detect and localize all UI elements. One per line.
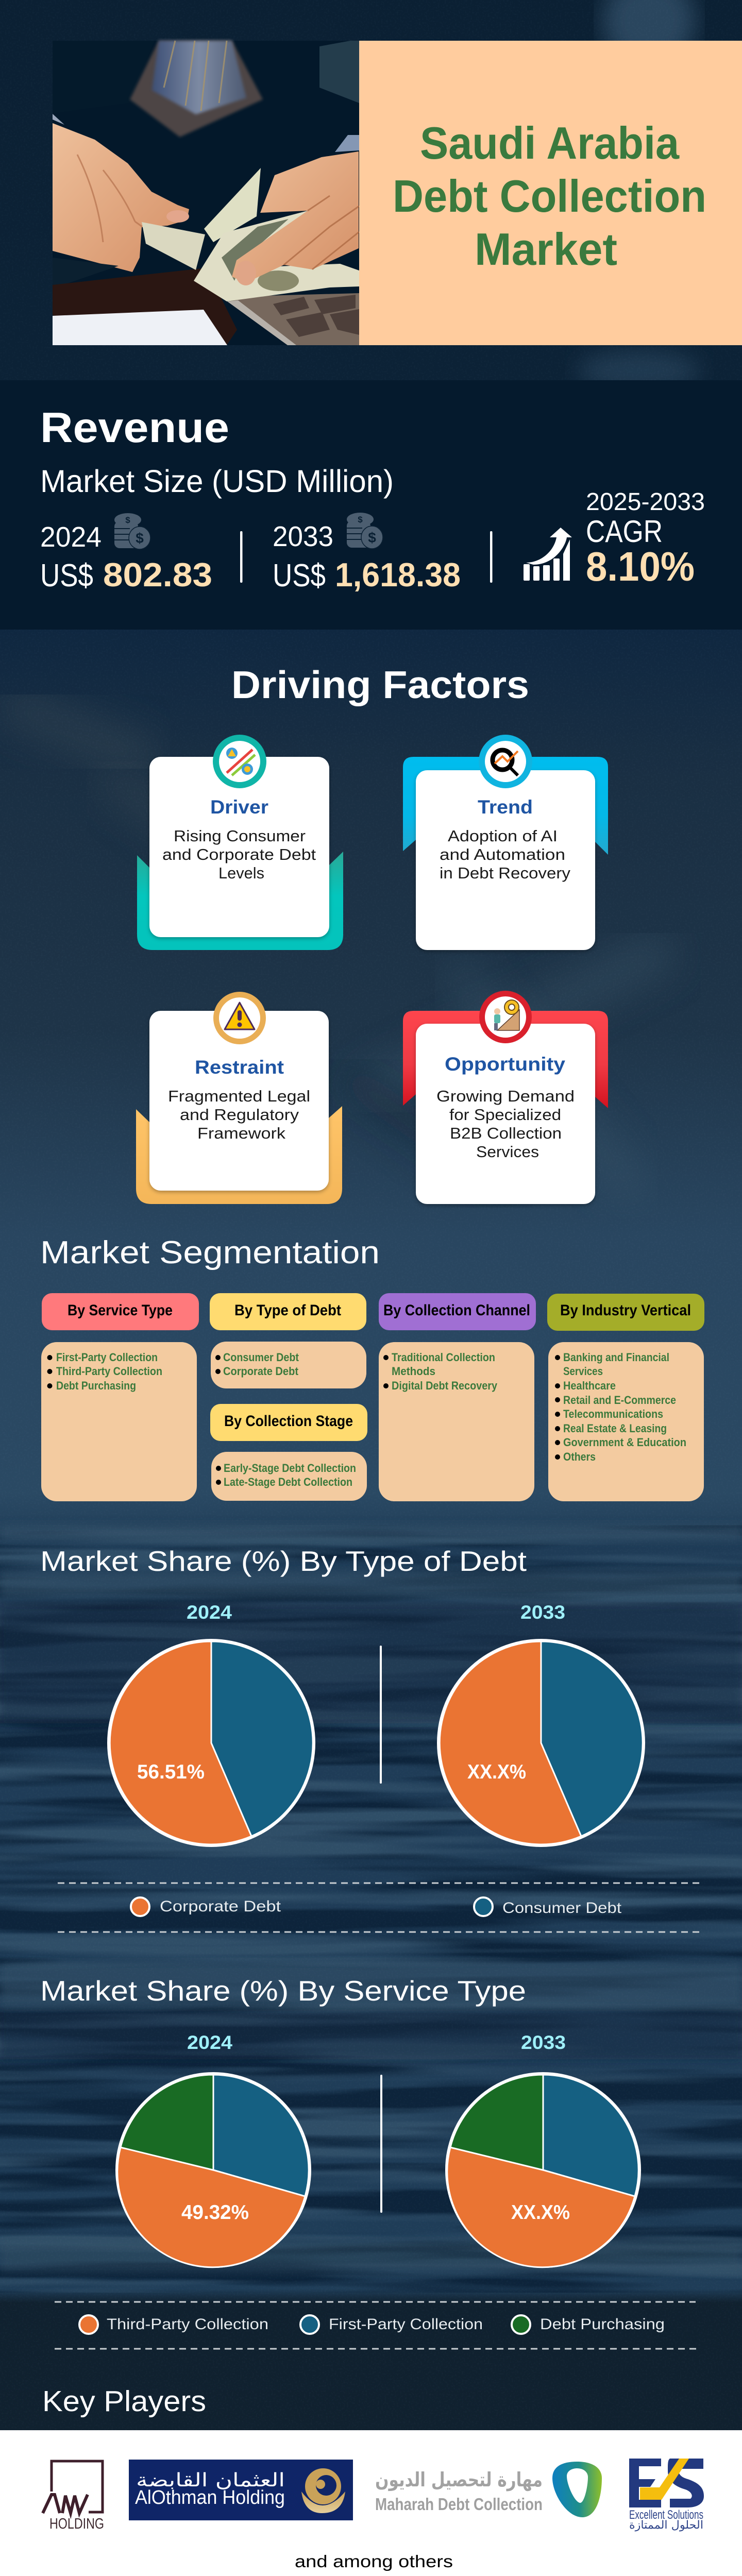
pie chart: service type 2024: 49.32%: [181, 2201, 249, 2224]
pie chart: service type 2024: [115, 2072, 311, 2268]
industry vertical list: Others: [563, 1450, 596, 1463]
logo: AlOthman Holding: [129, 2460, 353, 2520]
driver text: Levels: [218, 864, 264, 882]
panel: revenue: [0, 380, 742, 630]
type of debt list: Consumer Debt: [223, 1351, 299, 1364]
opportunity text: for Specialized: [449, 1106, 561, 1124]
opportunity text: [436, 1087, 575, 1161]
restraint text: [168, 1087, 310, 1142]
type of debt list: Corporate Debt: [223, 1365, 299, 1378]
opportunity text: Services: [476, 1143, 539, 1161]
value 2024: 802.83: [103, 556, 212, 594]
type of debt list: [215, 1351, 299, 1378]
hero: photo of hands counting money: [53, 41, 359, 345]
icon: coins 2024: $: [125, 515, 130, 525]
collection channel list: Methods: [392, 1365, 435, 1378]
panel: by industry vertical: [547, 1294, 704, 1501]
driver text: and Corporate Debt: [162, 845, 316, 863]
panel: by collection channel: [379, 1293, 536, 1501]
icon: coins 2024: $: [136, 530, 144, 546]
cagr: [586, 488, 705, 589]
panel: by type of debt: [210, 1293, 366, 1388]
trend text: [440, 827, 571, 882]
trend text: in Debt Recovery: [440, 864, 571, 882]
legend: service type: Third-Party Collection: [107, 2316, 268, 2333]
icon: growth chart arrow: [524, 528, 572, 581]
panel: by service type: By Service Type: [68, 1302, 173, 1319]
card: trend: [403, 735, 608, 950]
restraint text: and Regulatory: [180, 1106, 299, 1124]
collection channel list: Traditional Collection: [392, 1351, 495, 1364]
legend: type of debt: [131, 1897, 622, 1917]
panel: key players: [0, 2430, 742, 2576]
heading: key players: Key Players: [42, 2385, 206, 2418]
industry vertical list: [555, 1351, 686, 1463]
revenue heading: Revenue: [40, 403, 229, 451]
pie chart: type of debt 2033: XX.X%: [467, 1761, 526, 1783]
logo: Excellent Solutions: الحلول الممتازة: [629, 2519, 703, 2532]
year label 2024 service: 2024: [187, 2032, 232, 2053]
icon: coins 2033: [347, 513, 383, 549]
logo: AlOthman Holding: العثمان القابضة: [136, 2470, 285, 2491]
icon: coins 2024: [114, 513, 150, 549]
title: [393, 117, 706, 275]
pie chart: service type 2033: [445, 2072, 641, 2268]
industry vertical list: Retail and E-Commerce: [563, 1394, 676, 1406]
collection channel list: Digital Debt Recovery: [392, 1379, 498, 1392]
collection stage list: Early-Stage Debt Collection: [224, 1462, 356, 1475]
cagr: CAGR: [586, 514, 663, 549]
year label 2033 service: 2033: [521, 2032, 566, 2053]
value 2033: [273, 556, 461, 594]
icon: restraint: [213, 992, 266, 1044]
cagr: 8.10%: [586, 544, 695, 589]
panel: by collection stage: By Collection Stage: [224, 1413, 353, 1430]
icon: coins 2033: $: [358, 515, 363, 524]
panel: by industry vertical: By Industry Vertical: [560, 1302, 691, 1319]
logo: Excellent Solutions: [629, 2459, 704, 2532]
panel: by service type: [41, 1293, 199, 1501]
industry vertical list: Services: [563, 1365, 603, 1378]
driver text: Rising Consumer: [174, 827, 306, 845]
logo: Maharah Debt Collection: Maharah Debt Collection: [375, 2495, 543, 2514]
legend: service type: First-Party Collection: [329, 2316, 483, 2333]
legend: type of debt: Consumer Debt: [502, 1900, 622, 1917]
icon: opportunity: [479, 991, 532, 1043]
heading: market segmentation: Market Segmentation: [40, 1235, 380, 1270]
pie chart: service type 2033: XX.X%: [511, 2201, 570, 2224]
logo: Maharah Debt Collection: مهارة لتحصيل الديون: [375, 2468, 543, 2491]
trend text: Adoption of AI: [448, 827, 558, 845]
pie chart: type of debt 2024: [107, 1639, 315, 1847]
heading: market share by type of debt: Market Share (%) By Type of Debt: [40, 1545, 527, 1577]
title: Saudi Arabia: [420, 117, 680, 168]
panel: by collection stage: [210, 1404, 367, 1501]
title: Market: [475, 224, 617, 275]
driver title: Driver: [210, 796, 268, 818]
year label 2024: 2024: [187, 1602, 232, 1623]
logo: AW Holding: [43, 2461, 104, 2532]
pie chart: type of debt 2024: 56.51%: [137, 1761, 205, 1783]
heading: market share by service type: Market Share (%) By Service Type: [40, 1975, 526, 2007]
value 2024: US$: [40, 558, 93, 594]
restraint title: Restraint: [195, 1057, 284, 1078]
card: opportunity: [403, 991, 608, 1204]
service type list: [47, 1351, 162, 1392]
legend: type of debt: Corporate Debt: [160, 1898, 281, 1915]
cagr: 2025-2033: [586, 488, 705, 516]
industry vertical list: Healthcare: [563, 1379, 616, 1392]
trend title: Trend: [478, 796, 533, 818]
and among others: and among others: [295, 2552, 453, 2571]
hero: title panel: [359, 41, 742, 345]
title: Debt Collection: [393, 171, 706, 222]
industry vertical list: Government & Education: [563, 1436, 686, 1449]
service type list: First-Party Collection: [56, 1351, 158, 1364]
logo: AlOthman Holding: AlOthman Holding: [135, 2487, 285, 2509]
service type list: Third-Party Collection: [56, 1365, 162, 1378]
logo: Maharah Debt Collection: [375, 2462, 602, 2517]
service type list: Debt Purchasing: [56, 1379, 136, 1392]
icon: coins 2033: $: [368, 530, 376, 546]
opportunity text: B2B Collection: [450, 1124, 562, 1142]
collection channel list: [383, 1351, 498, 1392]
year 2033: 2033: [273, 520, 333, 552]
heading: driving factors: Driving Factors: [231, 663, 529, 706]
restraint text: Fragmented Legal: [168, 1087, 310, 1105]
industry vertical list: Real Estate & Leasing: [563, 1422, 667, 1435]
legend: service type: [79, 2315, 665, 2334]
logo: Excellent Solutions: Excellent Solutions: [629, 2508, 703, 2522]
opportunity title: Opportunity: [445, 1054, 565, 1075]
panel: by type of debt: By Type of Debt: [234, 1302, 341, 1319]
card: restraint: [136, 992, 342, 1204]
collection stage list: Late-Stage Debt Collection: [224, 1476, 352, 1488]
trend text: and Automation: [440, 845, 565, 863]
collection stage list: [216, 1462, 356, 1488]
panel: by collection channel: By Collection Channel: [383, 1302, 530, 1319]
card: driver: [137, 735, 343, 950]
icon: driver: [213, 735, 266, 788]
driver text: [162, 827, 316, 882]
restraint text: Framework: [197, 1124, 286, 1142]
year 2024: 2024: [40, 521, 102, 553]
industry vertical list: Banking and Financial: [563, 1351, 669, 1364]
opportunity text: Growing Demand: [436, 1087, 575, 1105]
value 2033: 1,618.38: [335, 556, 461, 594]
logo: AW Holding: HOLDING: [49, 2516, 104, 2532]
market size label: Market Size (USD Million): [40, 464, 394, 499]
industry vertical list: Telecommunications: [563, 1408, 663, 1420]
year label 2033: 2033: [520, 1602, 565, 1623]
value 2033: US$: [273, 558, 326, 594]
pie chart: type of debt 2033: [437, 1639, 645, 1847]
legend: service type: Debt Purchasing: [540, 2316, 665, 2333]
value 2024: [40, 556, 212, 594]
icon: trend: [479, 735, 532, 788]
